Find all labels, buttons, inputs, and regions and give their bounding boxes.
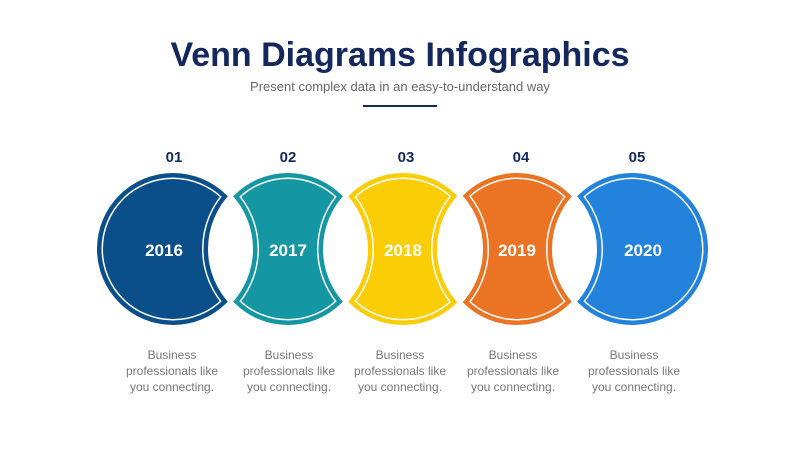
descriptions: professionals like <box>126 364 218 378</box>
descriptions: Business <box>610 348 658 362</box>
descriptions: you connecting. <box>592 380 676 394</box>
descriptions: you connecting. <box>247 380 331 394</box>
descriptions: you connecting. <box>130 380 214 394</box>
descriptions: professionals like <box>588 364 680 378</box>
shape 4 <box>462 173 572 325</box>
descriptions: Business <box>489 348 537 362</box>
step numbers: 02 <box>280 149 296 166</box>
descriptions: professionals like <box>243 364 335 378</box>
step numbers: 05 <box>629 149 645 166</box>
title: Venn Diagrams Infographics <box>170 36 630 74</box>
step numbers: 04 <box>513 149 530 166</box>
shape 1 <box>97 173 228 325</box>
shape 4: 2019 <box>498 241 536 260</box>
descriptions: professionals like <box>354 364 446 378</box>
step numbers: 03 <box>398 149 414 166</box>
descriptions: Business <box>148 348 196 362</box>
descriptions: Business <box>265 348 313 362</box>
descriptions: you connecting. <box>471 380 555 394</box>
shape 1: 2016 <box>145 241 183 260</box>
shape 3 <box>348 173 458 325</box>
descriptions <box>126 348 680 394</box>
shape 5: 2020 <box>624 241 662 260</box>
step numbers: 01 <box>166 149 182 166</box>
shape 2 <box>233 173 343 325</box>
step numbers <box>166 149 645 166</box>
descriptions: you connecting. <box>358 380 442 394</box>
shape 3: 2018 <box>384 241 422 260</box>
descriptions: Business <box>376 348 424 362</box>
descriptions: professionals like <box>467 364 559 378</box>
shape 2: 2017 <box>269 241 307 260</box>
subtitle: Present complex data in an easy-to-understand way <box>250 79 550 94</box>
shape 5 <box>577 173 708 325</box>
